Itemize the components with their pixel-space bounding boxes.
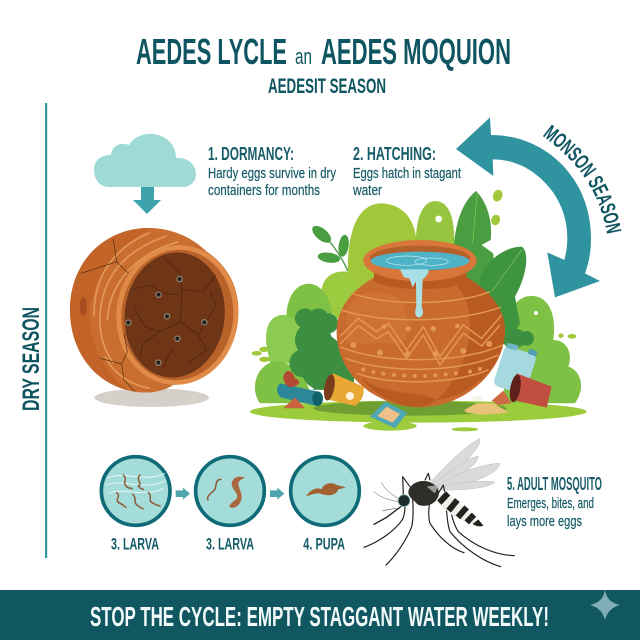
pot shadow [94,388,209,407]
illustration: water-filled pot with plants and litter [250,188,587,431]
stage circle: larva growing [196,457,264,525]
head [398,495,410,507]
clay pot body [337,277,505,407]
title: AEDES MOQUION [321,31,511,72]
background foliage [255,191,581,403]
stage labels: 4. PUPA [303,534,345,553]
pot rim [109,239,245,391]
title: AEDES LYCLE [136,31,287,72]
legs [364,473,514,567]
step 5 text: adult mosquito [507,474,602,530]
ground [250,401,587,423]
monsoon label: MONSON SEASON [543,124,622,234]
step 1 text: dormancy [208,144,336,199]
water surface [371,252,469,270]
step 2 text: hatching: water [352,182,382,199]
dormant eggs [126,276,207,365]
pot patterns [340,292,503,382]
litter: wrapper and paper [370,396,509,428]
abdomen [437,491,483,526]
arrow [270,488,284,500]
thorax [408,481,439,506]
icon: sparkle [590,590,620,620]
left litter: yellow can [322,373,364,406]
dry season timeline bar [45,103,47,558]
title: an [295,44,312,69]
right litter: red cup [492,373,552,408]
stage circle: larva group [101,457,170,525]
left litter: blue can [277,371,323,408]
life-cycle stage circles [101,457,359,553]
step 1 text: dormancy: Hardy eggs survive in dry [208,165,336,182]
dry season label: DRY SEASON [18,307,45,411]
cracked soil interior [118,247,231,383]
step 1 text: dormancy: 1. DORMANCY: [208,144,294,164]
water overflow drip [400,269,429,317]
stage labels [111,534,345,553]
title [136,31,511,72]
pot neck and rim [374,265,467,289]
stage labels: 3. LARVA [111,534,159,553]
step 5 text: adult mosquito: Emerges, bites, and [507,495,594,512]
antennae and proboscis [374,483,402,524]
leaf sprigs [252,188,576,362]
illustration: adult mosquito [364,438,514,567]
step 2 text: hatching: 2. HATCHING: [353,144,436,164]
illustration: cracked dry pot with eggs [70,228,245,407]
step 2 text: hatching: Eggs hatch in stagant [353,165,462,182]
subtitle: AEDESIT SEASON [268,75,386,98]
stage labels: 3. LARVA [206,534,254,553]
arrow [176,488,190,500]
step 5 text: adult mosquito: lays more eggs [507,513,582,530]
step 2 text: hatching [352,144,462,199]
wings [428,438,500,490]
monsoon season cycle arrow [456,118,622,298]
icon: cloud with down arrow [94,134,196,214]
stage circle: pupa [291,457,359,525]
bottom banner [0,590,640,640]
step 1 text: dormancy: containers for months [208,182,320,199]
right litter: plastic bottle [493,343,538,395]
